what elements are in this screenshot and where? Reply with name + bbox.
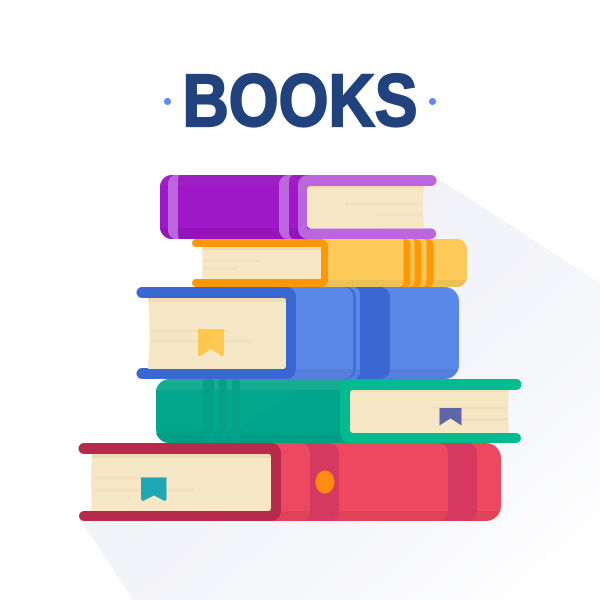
spine bottom shade xyxy=(156,433,360,443)
book: green xyxy=(156,379,522,443)
cover xyxy=(136,287,296,379)
spine bands xyxy=(300,443,339,521)
page top edge xyxy=(202,247,321,250)
book: purple, top xyxy=(160,175,437,239)
bookmark xyxy=(440,408,462,426)
right dot xyxy=(429,98,436,105)
spine bottom shade xyxy=(320,280,466,287)
cover xyxy=(192,239,328,287)
spine xyxy=(320,239,467,287)
spine xyxy=(156,379,360,443)
spine bottom shade xyxy=(160,228,310,239)
spine bands xyxy=(343,287,356,379)
spine bottom shade xyxy=(280,369,458,379)
pages xyxy=(202,247,321,279)
title text: BOOKS xyxy=(182,59,418,142)
spine top sheen xyxy=(160,175,310,186)
diagonal sheen xyxy=(156,390,300,428)
book: blue xyxy=(136,287,459,379)
long drop shadow xyxy=(79,177,600,600)
pages xyxy=(91,454,271,511)
page top edge xyxy=(92,454,271,458)
text lines xyxy=(94,476,168,480)
text lines xyxy=(203,259,260,262)
page top edge xyxy=(307,186,424,188)
text lines xyxy=(431,406,508,410)
spine top sheen xyxy=(156,379,360,390)
text lines xyxy=(151,330,228,332)
spine xyxy=(280,287,459,379)
left dot xyxy=(164,98,171,105)
cover xyxy=(298,175,437,239)
spine xyxy=(260,443,501,521)
spine bands xyxy=(168,175,179,239)
text lines xyxy=(345,202,422,206)
book: yellow xyxy=(192,239,467,287)
bookmark xyxy=(198,329,224,356)
spine oval xyxy=(316,470,334,494)
cover xyxy=(340,379,522,443)
spine bottom shade xyxy=(260,511,499,521)
pages xyxy=(350,390,509,433)
title xyxy=(164,59,436,142)
page top edge xyxy=(148,298,286,302)
spine xyxy=(160,175,310,239)
book: red, bottom xyxy=(78,443,501,521)
spine bands xyxy=(203,379,214,443)
cover xyxy=(78,443,281,521)
spine bands xyxy=(400,239,434,287)
bookmark xyxy=(141,478,166,501)
pages xyxy=(148,298,286,369)
page top edge xyxy=(350,390,509,392)
pages xyxy=(307,186,424,228)
